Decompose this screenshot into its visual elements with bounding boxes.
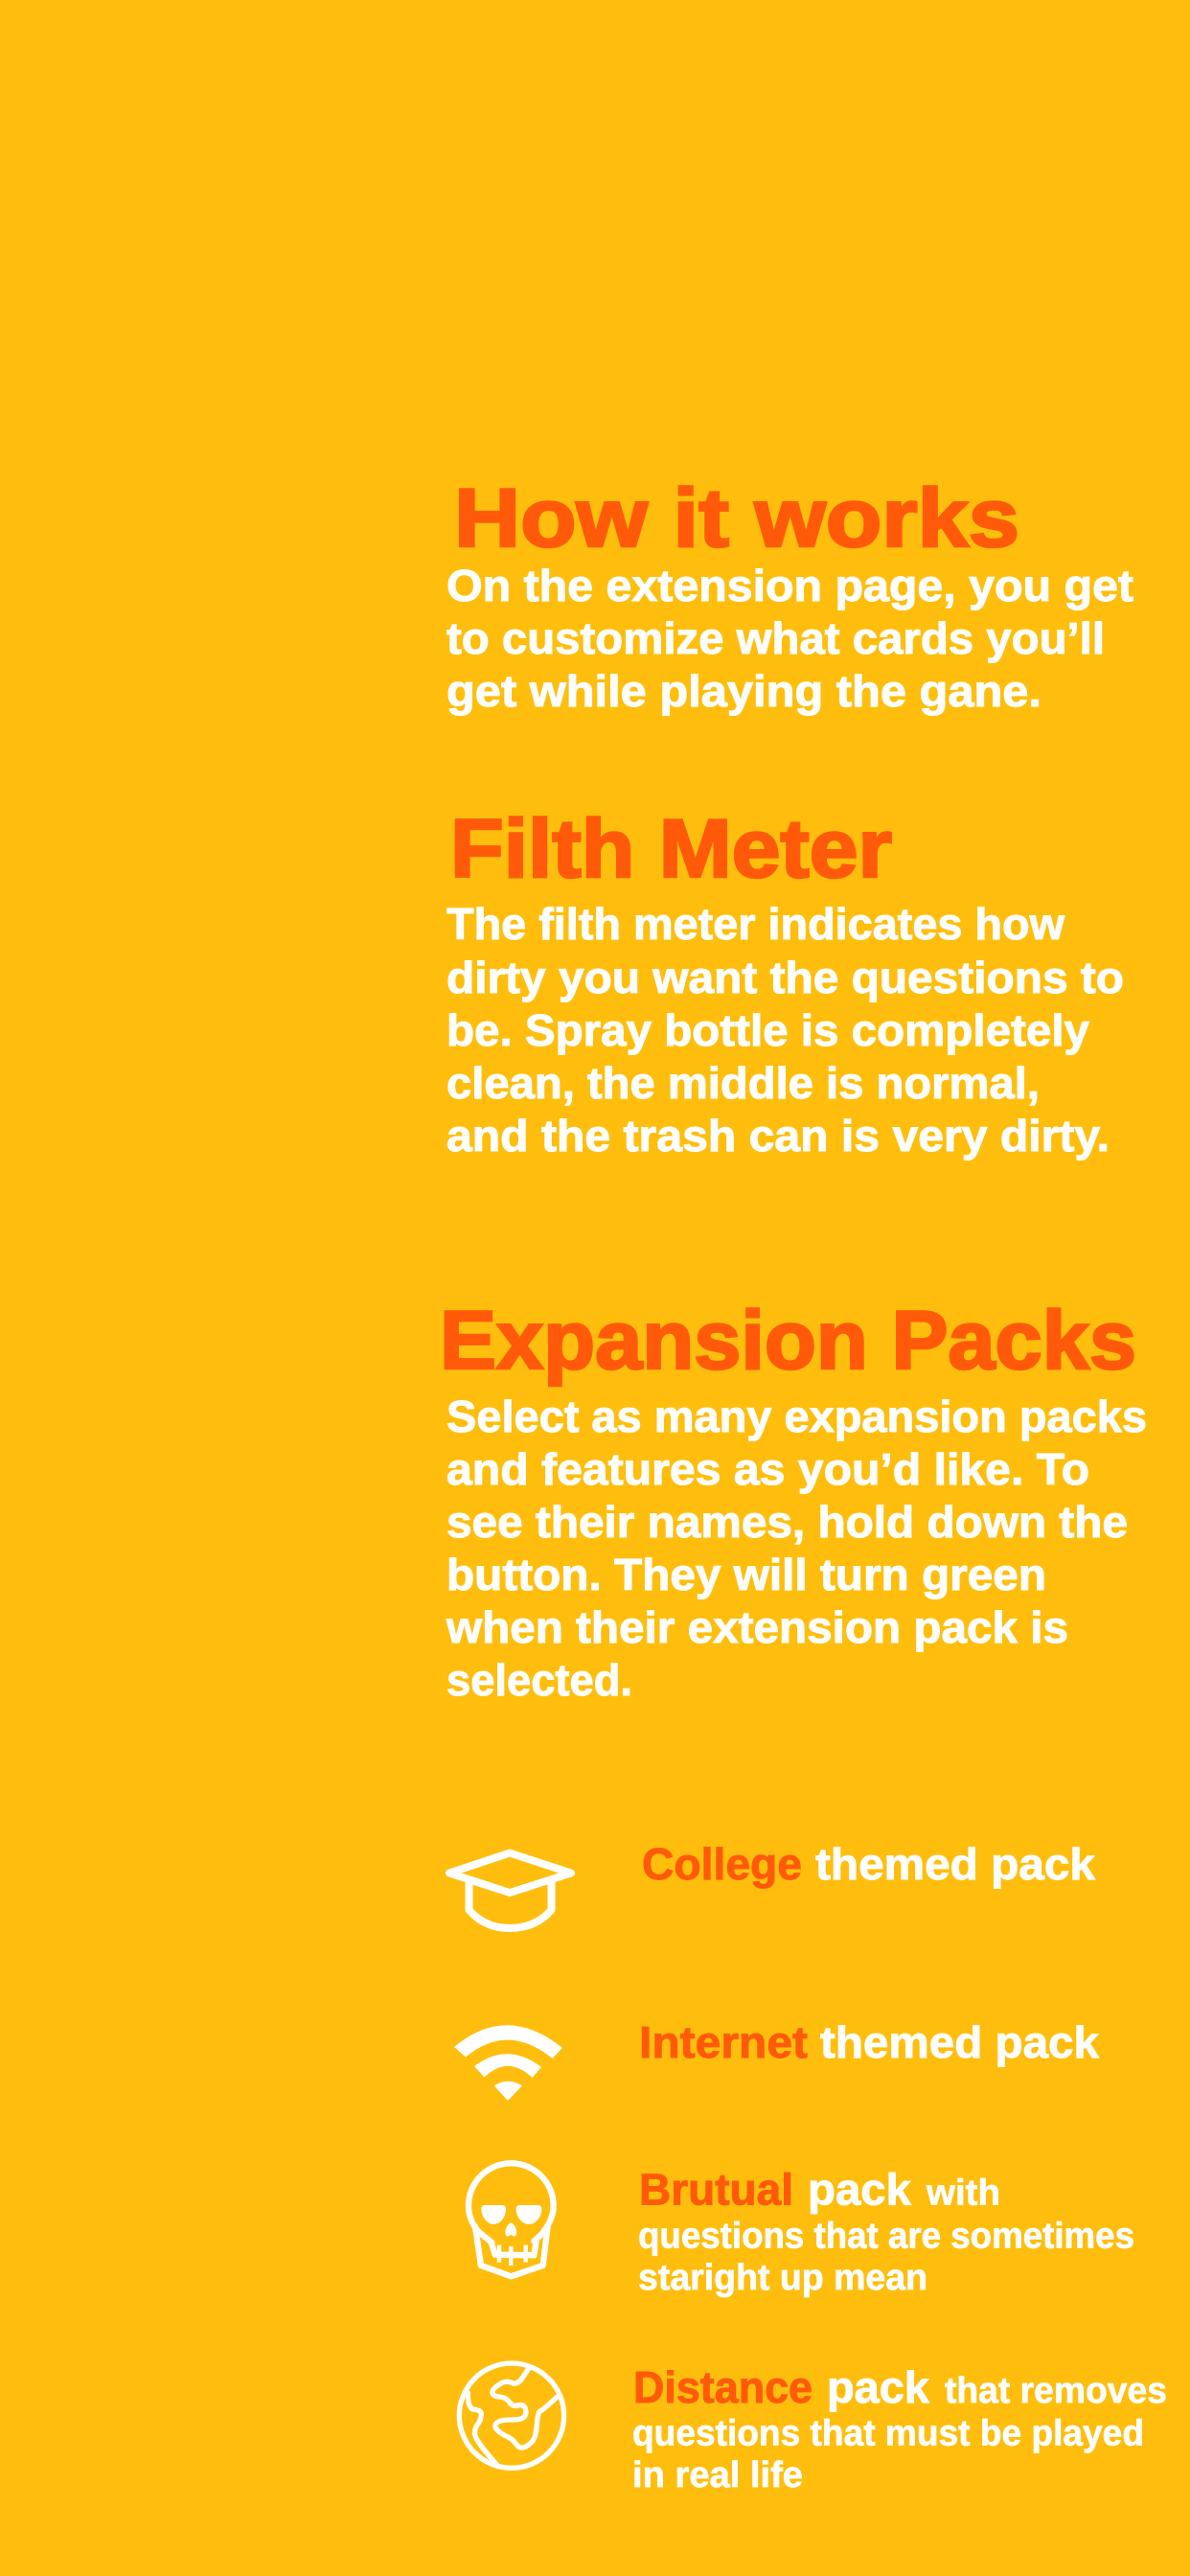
pack label: Brutual: pack [808,2164,911,2214]
text block: expansion packs description [446,1392,1147,1705]
text block: how it works description: get while playing the gane. [446,666,1041,716]
pack label: Brutual: questions that are sometimes [638,2216,1134,2256]
pack label: Brutual: with [926,2174,1000,2214]
text block: how it works description: On the extension page, you get [446,561,1133,610]
pack label: Brutual [638,2164,1134,2298]
pack label: College: themed pack [815,1839,1095,1889]
text block: how it works description: to customize what cards you’ll [446,613,1105,663]
text block: expansion packs description: see their names, hold down the [446,1497,1128,1547]
heading: How it works: How it works [454,472,1019,564]
pack label: Distance: that removes [945,2371,1167,2411]
pack label: Internet [639,2017,1099,2067]
pack label: Distance: questions that must be played [632,2413,1144,2453]
pack label: Distance: Distance [633,2362,812,2412]
text block: filth meter description: be. Spray bottle is completely [446,1005,1089,1055]
icon: skull [469,2163,554,2276]
pack label: Distance: in real life [632,2455,803,2496]
text block: expansion packs description: Select as many expansion packs [446,1392,1147,1441]
text block: filth meter description [446,899,1124,1161]
pack label: College [642,1839,1095,1889]
text block: expansion packs description: button. They will turn green [446,1550,1046,1599]
pack label: Internet: Internet [639,2017,808,2067]
pack label: College: College [642,1839,802,1889]
icon: graduation cap [449,1853,571,1928]
pack label: Internet: themed pack [820,2017,1099,2067]
text block: filth meter description: and the trash can is very dirty. [446,1111,1110,1161]
heading: Filth Meter: Filth Meter [450,803,892,895]
text block: filth meter description: The filth meter indicates how [446,899,1064,949]
pack label: Distance [632,2362,1167,2496]
text block: filth meter description: dirty you want the questions to [446,953,1124,1002]
pack label: Brutual: Brutual [639,2164,793,2214]
icon: wifi [454,2025,562,2101]
icon: globe [459,2363,564,2468]
text block: how it works description [446,561,1133,716]
pack label: Brutual: staright up mean [638,2258,927,2298]
text block: expansion packs description: and features as you’d like. To [446,1444,1089,1494]
text block: expansion packs description: when their extension pack is [446,1602,1068,1652]
text block: filth meter description: clean, the middle is normal, [446,1058,1040,1108]
heading: Expansion Packs: Expansion Packs [440,1295,1136,1387]
text block: expansion packs description: selected. [446,1655,632,1705]
pack label: Distance: pack [827,2362,929,2412]
